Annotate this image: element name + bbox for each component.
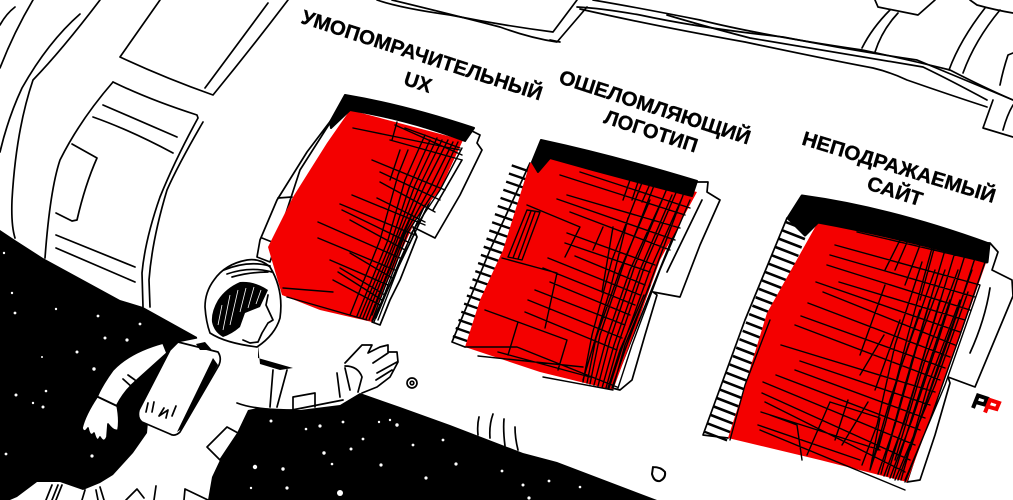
window one frame tick [262, 197, 292, 242]
window three tab inner line [970, 288, 990, 353]
astronaut chest patch [293, 393, 315, 410]
heading: stunning logo [556, 65, 754, 157]
window two strip edge [452, 163, 530, 347]
red P [985, 400, 999, 412]
backpack dark edge [177, 358, 218, 432]
astronaut hip pocket [207, 427, 238, 460]
astronaut cuff line [96, 396, 117, 406]
heading line two: САЙТ [864, 171, 926, 211]
astronaut backpack [138, 342, 220, 435]
heading: inimitable site [799, 126, 999, 211]
heading line one: НЕПОДРАЖАЕМЫЙ [799, 126, 999, 208]
window three hatching [730, 232, 985, 490]
window two tab inner line [667, 200, 702, 272]
window one tab inner line [433, 160, 462, 210]
heading line two: UX [401, 68, 435, 98]
debris ring right [652, 467, 665, 481]
astronaut [10, 260, 398, 500]
panel: window one [257, 95, 482, 325]
astronaut glove outline [345, 345, 398, 393]
window three right tab [907, 243, 1013, 482]
astronaut waist line [237, 400, 343, 410]
debris ring left [407, 378, 417, 388]
window three red screen [728, 222, 987, 482]
window three strip edge [703, 218, 787, 438]
astronaut face profile [243, 295, 273, 343]
heading line one: УМОПОМРАЧИТЕЛЬНЫЙ [298, 5, 546, 105]
astronaut arm seam [123, 375, 135, 388]
window two right tab [612, 182, 720, 390]
panel: window two [452, 140, 720, 390]
astronaut body silhouette [10, 338, 398, 500]
icon: PP logo [973, 396, 999, 412]
window one red screen [268, 110, 463, 322]
space left [0, 230, 215, 500]
hair highlights [218, 287, 261, 330]
spaceship hull line work [0, 0, 1013, 307]
heading line one: ОШЕЛОМЛЯЮЩИЙ [556, 65, 754, 149]
black P [973, 396, 987, 408]
stars [3, 252, 581, 500]
astronaut hair [212, 282, 268, 337]
window three black top bar [788, 196, 989, 262]
astronaut helmet [205, 260, 281, 347]
debris and scratches [407, 378, 665, 481]
space bottom [200, 393, 657, 500]
astronaut right arm cuffs [270, 366, 362, 407]
heading line two: ЛОГОТИП [601, 107, 700, 157]
window two red screen [465, 158, 697, 390]
window one right tab [372, 128, 482, 325]
black space background [0, 230, 657, 500]
window two hatching [465, 172, 690, 390]
window one hatching [283, 122, 462, 322]
panel: window three [703, 196, 1013, 490]
astronaut shoulder clasp [196, 342, 212, 350]
window one side frame [257, 115, 335, 262]
helmet top stripes [224, 264, 272, 277]
astronaut left arm and hand [82, 343, 167, 440]
astronaut neck dark collar [258, 345, 293, 370]
window one black top bar [330, 95, 474, 141]
backpack marks [146, 402, 176, 418]
window two black top bar [532, 140, 697, 196]
heading: amazing UX [298, 5, 546, 105]
window two ladder strip [462, 168, 523, 345]
window three ladder strip [715, 225, 797, 437]
motion scratches [478, 414, 518, 450]
astronaut leg details [46, 485, 208, 500]
